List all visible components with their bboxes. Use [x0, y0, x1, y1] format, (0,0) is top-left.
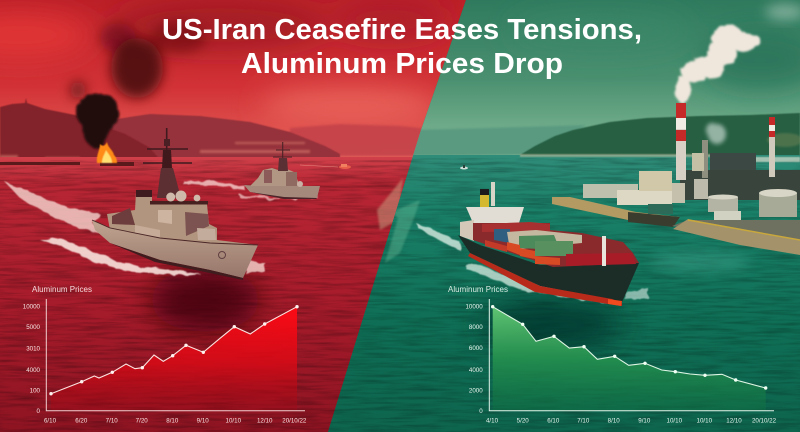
x axis labels: 7/10 — [577, 418, 590, 424]
x axis labels: 6/10 — [44, 418, 57, 424]
faded red-side transition arrow — [377, 178, 403, 230]
red boot stripe — [468, 253, 622, 306]
breakwater — [673, 219, 800, 255]
containers — [482, 222, 550, 232]
container ship — [458, 182, 639, 306]
cream block behind chimney — [692, 153, 704, 171]
y axis labels: 3010 — [26, 346, 41, 352]
red hill centre — [110, 114, 340, 158]
dark plant hall — [710, 153, 756, 191]
panel: red conflict scene — [0, 0, 480, 432]
chart title: Aluminum Prices — [448, 285, 508, 294]
quay surface — [672, 220, 800, 240]
factory smoke — [675, 25, 761, 103]
container stack base — [473, 223, 639, 267]
x axis labels: 7/20 — [136, 418, 148, 424]
y axis labels — [23, 303, 41, 415]
x axis labels: 9/10 — [197, 418, 209, 424]
x axis labels: 5/20 — [517, 418, 529, 424]
red price line — [51, 307, 297, 394]
x axis labels: 12/10 — [257, 418, 273, 424]
white wake of warship — [5, 179, 318, 276]
x axis labels: 10/10 — [226, 418, 242, 424]
green area fill — [493, 307, 766, 411]
x axis labels: 20/10/22 — [282, 418, 307, 424]
axes — [46, 299, 305, 411]
secondary stack — [702, 140, 708, 178]
low buildings — [583, 184, 638, 198]
storage tanks — [708, 189, 797, 220]
x axis labels: 7/10 — [106, 418, 118, 424]
dark reflection under warship — [150, 268, 260, 332]
x axis labels: 8/10 — [166, 418, 179, 424]
green near hill — [520, 113, 800, 158]
aft deckhouse details — [136, 190, 152, 197]
y axis labels: 5000 — [26, 324, 41, 331]
green price line — [493, 307, 766, 388]
green far hills — [413, 125, 584, 155]
x axis labels — [486, 418, 777, 424]
y axis labels: 0 — [37, 408, 41, 415]
dark reflection under container ship — [480, 297, 620, 353]
y axis labels: 2000 — [469, 388, 483, 394]
reflection glow near plant — [650, 252, 750, 272]
y axis labels: 100 — [30, 388, 41, 394]
axes — [489, 299, 774, 411]
green sky — [412, 0, 800, 158]
red-white chimney right — [769, 117, 775, 177]
green water ripple texture — [320, 158, 800, 432]
red shoreline lights — [0, 141, 311, 157]
barges — [0, 162, 134, 166]
red hill left — [0, 98, 158, 157]
title: US-Iran Ceasefire Eases Tensions, — [162, 14, 642, 46]
red area fill — [51, 307, 297, 411]
x axis labels: 20/10/22 — [752, 418, 777, 424]
forward gun — [197, 228, 216, 240]
distant boat — [460, 165, 468, 170]
y axis labels: 8000 — [469, 324, 483, 331]
y axis labels: 10000 — [465, 303, 483, 310]
green wake — [415, 222, 648, 304]
main warship — [92, 128, 258, 280]
data markers — [49, 305, 299, 395]
x axis labels: 12/10 — [726, 418, 742, 424]
x axis labels: 4/10 — [486, 418, 499, 424]
chart title: Aluminum Prices — [32, 285, 92, 294]
black smoke column — [77, 92, 119, 147]
chart: aluminum prices rising (red) — [23, 285, 307, 424]
x axis labels: 8/10 — [608, 418, 620, 424]
y axis labels: 6000 — [469, 345, 483, 352]
x axis labels: 10/10 — [667, 418, 683, 424]
accommodation block — [466, 207, 524, 223]
secondary steam — [706, 123, 726, 144]
power plant — [552, 103, 800, 255]
y axis labels: 4000 — [26, 367, 41, 374]
hill light patches — [767, 133, 800, 147]
x axis labels — [44, 418, 307, 424]
far shore — [520, 154, 750, 157]
red water ripple texture — [0, 160, 412, 432]
faded green-side transition arrow — [385, 200, 420, 263]
mast and funnel — [480, 189, 489, 207]
pier — [552, 197, 680, 226]
title — [162, 14, 642, 80]
y axis labels: 10000 — [23, 303, 41, 310]
red sea — [0, 157, 412, 432]
panel: green recovery scene — [320, 0, 800, 432]
x axis labels: 6/10 — [547, 418, 560, 424]
red far hills — [290, 124, 440, 156]
flame — [97, 142, 117, 163]
dark clouds — [0, 0, 450, 123]
hull — [92, 220, 258, 278]
green cloud shading — [702, 31, 800, 103]
red-white chimney left — [676, 103, 686, 180]
red sky — [0, 0, 480, 158]
data markers — [491, 305, 767, 390]
superstructure mass — [107, 192, 258, 246]
upper smoke — [70, 22, 206, 99]
x axis labels: 6/20 — [75, 418, 88, 424]
x axis labels: 10/10 — [697, 418, 713, 424]
green sea — [320, 155, 800, 432]
y axis labels — [465, 303, 483, 415]
y axis labels: 4000 — [469, 367, 483, 374]
steam top right — [765, 4, 800, 20]
distant patrol boat — [300, 164, 351, 169]
title: Aluminum Prices Drop — [241, 48, 563, 80]
mast — [143, 128, 192, 164]
x axis labels: 9/10 — [638, 418, 651, 424]
chart: aluminum prices falling (green) — [448, 285, 777, 424]
y axis labels: 0 — [479, 408, 483, 415]
radar domes — [166, 190, 200, 202]
hull — [458, 235, 639, 302]
far warship — [244, 142, 320, 199]
